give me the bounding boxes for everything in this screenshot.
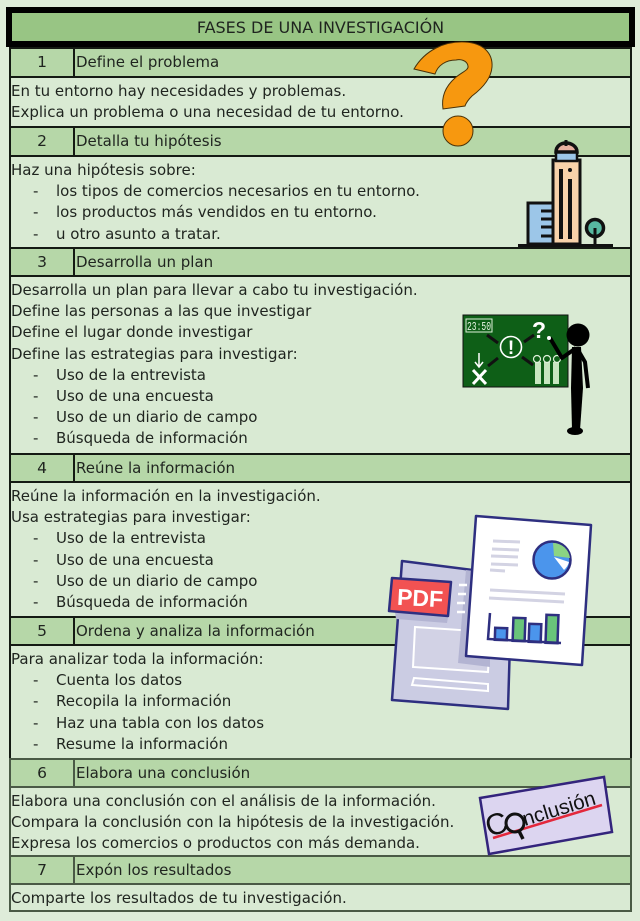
phase 5 text: Cuenta los datos [56, 671, 182, 689]
phase 3 text: - [33, 366, 38, 384]
icon: conclusion label [480, 777, 612, 854]
phase 3 text: Define el lugar donde investigar [11, 323, 252, 341]
phase 7 text: Comparte los resultados de tu investigación. [11, 889, 347, 907]
phase 4 heading: Reúne la información [76, 459, 235, 477]
phase 6 text: Compara la conclusión con la hipótesis de la investigación. [11, 813, 454, 831]
phase 4 text: - [33, 593, 38, 611]
phase 5 heading: Ordena y analiza la información [76, 622, 315, 640]
phase 7 number [9, 855, 73, 884]
phase 1 number [9, 47, 73, 76]
phase 4 text: Uso de un diario de campo [56, 572, 257, 590]
icon: PDF documents [389, 516, 591, 709]
title: FASES DE UNA INVESTIGACIÓN [197, 18, 444, 37]
icon: question mark [414, 42, 492, 146]
title [6, 7, 635, 47]
phase 3 heading [73, 247, 632, 276]
phase 1 heading: Define el problema [76, 53, 219, 71]
phase 4 text [9, 481, 632, 616]
phase 4 text: Reúne la información en la investigación. [11, 487, 321, 505]
icon: PDF documents: PDF [396, 584, 444, 612]
phase 4 text: - [33, 529, 38, 547]
icon: conclusion label: C [481, 806, 512, 844]
icon: city buildings [518, 140, 613, 247]
phase 2 text: - [33, 203, 38, 221]
phase 7 text [9, 883, 632, 912]
phase 2 number: 2 [37, 132, 47, 150]
phase 3 text: Búsqueda de información [56, 429, 248, 447]
phase 4 text: - [33, 551, 38, 569]
phase 7 heading: Expón los resultados [76, 861, 231, 879]
phase 2 number [9, 126, 73, 155]
phase 6 number: 6 [37, 764, 47, 782]
phase 6 text: Elabora una conclusión con el análisis de la información. [11, 792, 436, 810]
phase 2 heading [73, 126, 632, 155]
phase 3 text: - [33, 429, 38, 447]
phase 5 number: 5 [37, 622, 47, 640]
phase 1 number: 1 [37, 53, 47, 71]
phase 5 text: - [33, 735, 38, 753]
phase 5 text: - [33, 692, 38, 710]
phase 3 text: Uso de la entrevista [56, 366, 206, 384]
phase 6 number [9, 758, 73, 787]
phase 4 text: Uso de la entrevista [56, 529, 206, 547]
phase 2 text: los tipos de comercios necesarios en tu entorno. [56, 182, 420, 200]
phase 2 heading: Detalla tu hipótesis [76, 132, 222, 150]
phase 6 heading: Elabora una conclusión [76, 764, 250, 782]
icon: teacher at green board [463, 315, 590, 435]
phase 4 number [9, 453, 73, 482]
icon: teacher at green board: ! [508, 338, 514, 359]
phase 3 heading: Desarrolla un plan [76, 253, 213, 271]
phase 5 text: Recopila la información [56, 692, 231, 710]
phase 2 text: u otro asunto a tratar. [56, 225, 221, 243]
phase 7 heading [73, 855, 632, 884]
phase 4 text: Usa estrategias para investigar: [11, 508, 251, 526]
phase 3 text: Uso de una encuesta [56, 387, 214, 405]
phase 2 text: - [33, 225, 38, 243]
phase 6 text: Expresa los comercios o productos con más demanda. [11, 834, 420, 852]
phase 4 number: 4 [37, 459, 47, 477]
phase 4 heading [73, 453, 632, 482]
phase 2 text: los productos más vendidos en tu entorno. [56, 203, 377, 221]
phase 1 text: Explica un problema o una necesidad de tu entorno. [11, 103, 404, 121]
phase 3 text: Define las personas a las que investigar [11, 302, 311, 320]
phase 3 text: Define las estrategias para investigar: [11, 345, 298, 363]
phase 1 text [9, 76, 632, 126]
phase 4 text: Uso de una encuesta [56, 551, 214, 569]
phase 7 number: 7 [37, 861, 47, 879]
phase 1 heading [73, 47, 632, 76]
phase 5 text: Haz una tabla con los datos [56, 714, 264, 732]
phase 5 text [9, 644, 632, 758]
phase 5 text: Resume la información [56, 735, 228, 753]
phase 3 text: Desarrolla un plan para llevar a cabo tu investigación. [11, 281, 418, 299]
phase 3 number [9, 247, 73, 276]
phase 3 text: - [33, 387, 38, 405]
phase 5 heading [73, 616, 632, 645]
phase 3 text [9, 275, 632, 453]
phase 5 text: - [33, 671, 38, 689]
icon: conclusion label: nclusión [520, 787, 598, 831]
phase 5 number [9, 616, 73, 645]
phase 1 text: En tu entorno hay necesidades y problemas. [11, 82, 346, 100]
phase 5 text: Para analizar toda la información: [11, 650, 264, 668]
phase 5 text: - [33, 714, 38, 732]
icon: teacher at green board: 23:50 [467, 320, 491, 334]
phase 2 text: - [33, 182, 38, 200]
phase 4 text: - [33, 572, 38, 590]
phase 2 text [9, 155, 632, 248]
phase 3 number: 3 [37, 253, 47, 271]
phase 3 text: Uso de un diario de campo [56, 408, 257, 426]
phase 4 text: Búsqueda de información [56, 593, 248, 611]
phase 2 text: Haz una hipótesis sobre: [11, 161, 196, 179]
phase 3 text: - [33, 408, 38, 426]
phase 6 heading [73, 758, 632, 787]
icon: teacher at green board: ? [532, 317, 546, 343]
phase 6 text [9, 786, 632, 855]
